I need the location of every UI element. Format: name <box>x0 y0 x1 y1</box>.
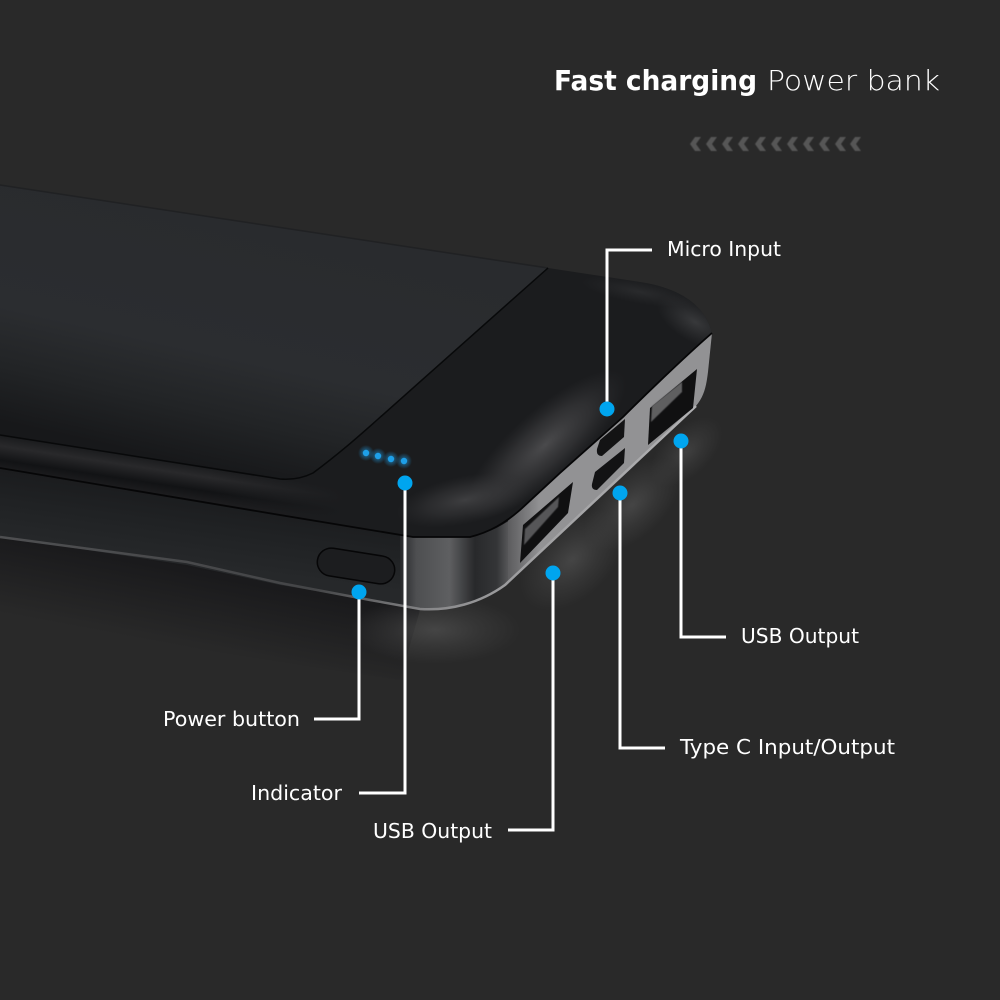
callout: Power button <box>163 584 366 731</box>
top surface shading <box>0 286 712 520</box>
callout: USB Output left: USB Output <box>373 819 492 843</box>
bottom edge highlight <box>0 406 696 609</box>
device body side <box>0 333 712 610</box>
LED indicators <box>358 445 412 469</box>
callout: Indicator: Indicator <box>251 781 343 805</box>
callout: USB Output right <box>674 434 859 648</box>
callout: Micro Input <box>600 237 781 416</box>
power button <box>315 546 397 586</box>
callout: Type C Input/Output: Type C Input/Output <box>679 735 895 759</box>
silver port face <box>508 333 712 582</box>
infographic canvas <box>0 69 939 842</box>
title: Fast charging <box>554 64 757 97</box>
callout: Micro Input: Micro Input <box>667 237 781 261</box>
title: Power bank <box>767 64 940 97</box>
seam line <box>0 333 712 537</box>
corner highlight <box>400 520 510 610</box>
dark band under panel <box>0 442 266 494</box>
micro port <box>597 419 625 456</box>
top inset panel <box>0 185 548 479</box>
callout: Power button: Power button <box>163 707 300 731</box>
power bank device <box>0 185 741 610</box>
type C port <box>592 448 625 490</box>
callout: Type C Input/Output <box>612 486 895 759</box>
floor reflection glow <box>350 404 735 664</box>
title <box>554 64 940 97</box>
callout: USB Output right: USB Output <box>741 624 859 648</box>
chevron row <box>690 137 861 151</box>
USB port left <box>520 482 573 563</box>
callout: USB Output left <box>373 566 560 843</box>
USB port right <box>648 369 697 445</box>
floor shadow <box>0 537 420 680</box>
callout: Indicator <box>251 476 412 805</box>
top surface <box>0 185 712 537</box>
band fade <box>292 490 345 513</box>
